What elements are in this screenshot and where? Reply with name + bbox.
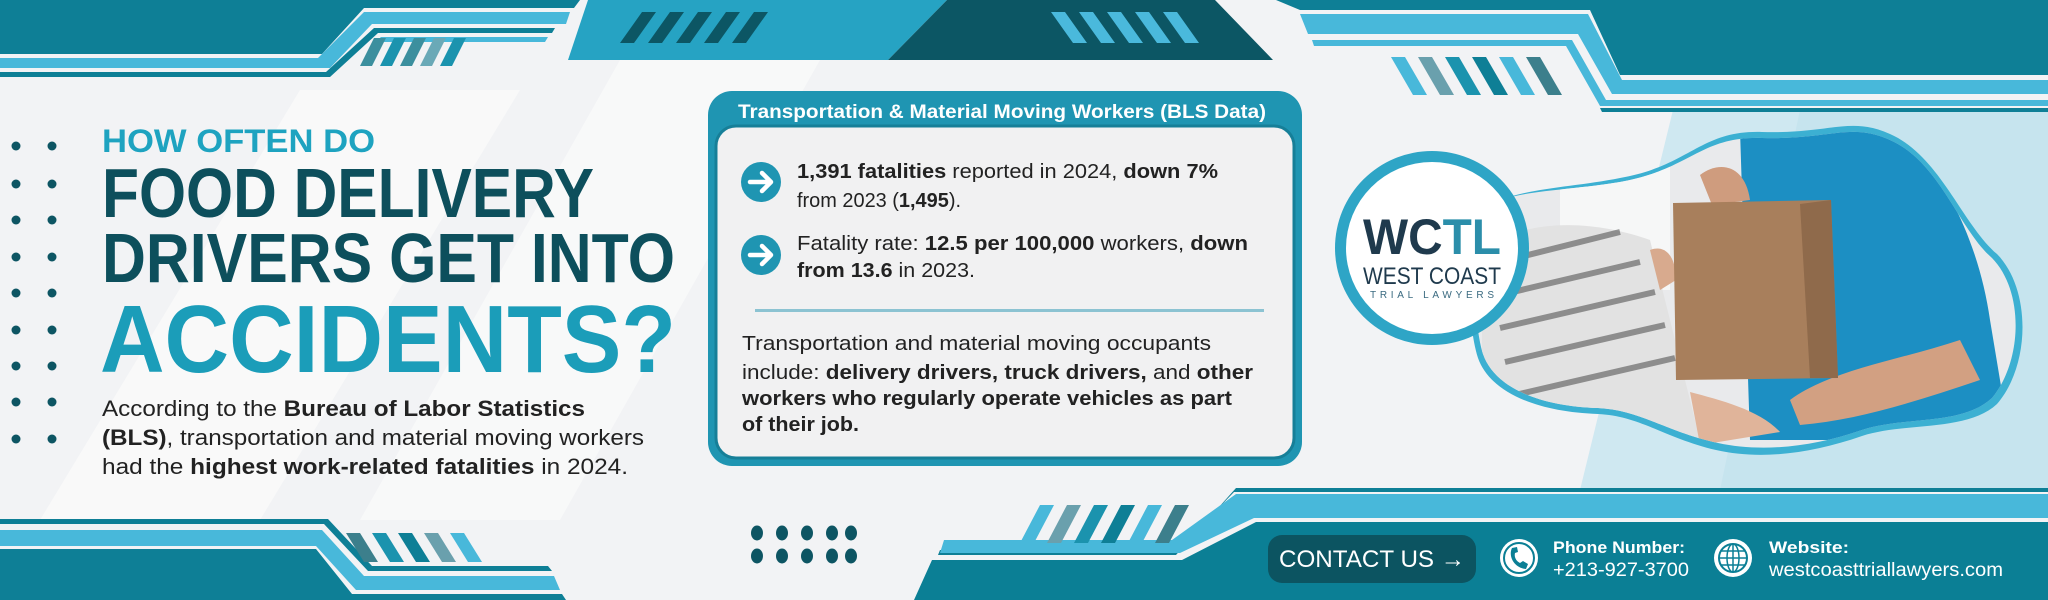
decorative dots grid [751, 526, 857, 564]
icon: arrow 1 [741, 162, 781, 202]
top-right decoration [1276, 0, 2048, 112]
logo: West Coast Trial Lawyers [1335, 151, 1529, 345]
website text: westcoasttriallawyers.com [1768, 560, 2003, 581]
intro paragraph [102, 396, 644, 479]
title block: FOOD DELIVERY [102, 154, 594, 232]
phone text: +213-927-3700 [1553, 560, 1689, 581]
website text [1768, 538, 2003, 581]
card paragraph: of their job. [742, 414, 859, 436]
icon: arrow 2 [741, 235, 781, 275]
logo: West Coast Trial Lawyers: WEST COAST [1363, 263, 1501, 290]
logo: West Coast Trial Lawyers: TRIAL LAWYERS [1370, 290, 1494, 301]
logo: West Coast Trial Lawyers: WCTL [1363, 209, 1501, 265]
card paragraph: workers who regularly operate vehicles as part [741, 388, 1232, 410]
website text: Website: [1769, 538, 1849, 557]
intro paragraph: According to the Bureau of Labor Statistics [102, 396, 585, 421]
intro paragraph: had the highest work-related fatalities in 2024. [102, 454, 628, 479]
top-center decoration [568, 0, 1273, 60]
intro paragraph: (BLS) , transportation and material moving workers [102, 425, 644, 450]
title block: DRIVERS GET INTO [102, 219, 675, 297]
card header: Transportation & Material Moving Workers (BLS Data) [738, 102, 1266, 123]
card paragraph [741, 333, 1253, 436]
icon: globe [1714, 539, 1752, 577]
title block: HOW OFTEN DO [102, 123, 375, 159]
photo: delivery handoff [1470, 120, 2030, 460]
bullet 1 text: from 2023 (1,495). [797, 190, 961, 212]
bullet 1 text: 1,391 fatalities reported in 2024, down 7% [797, 161, 1218, 183]
bottom-left decoration [0, 519, 566, 600]
card paragraph: include: delivery drivers, truck drivers, and other [742, 362, 1253, 384]
panel: BLS data card [708, 91, 1302, 466]
title block [100, 123, 676, 393]
contact us button: CONTACT US → [1279, 546, 1465, 573]
top-left decoration [0, 0, 580, 77]
bottom-right decoration [914, 488, 2048, 600]
phone text: Phone Number: [1553, 538, 1685, 557]
contact us button [1268, 535, 1476, 583]
title block: ACCIDENTS? [100, 286, 676, 393]
bullet 2 text: from 13.6 in 2023. [797, 260, 975, 282]
icon: phone [1500, 539, 1538, 577]
decorative dots: left column [12, 142, 56, 444]
phone text [1553, 538, 1689, 581]
bullet 1 text [797, 161, 1218, 212]
bullet 2 text: Fatality rate: 12.5 per 100,000 workers, down [797, 233, 1248, 255]
card paragraph: Transportation and material moving occupants [742, 333, 1211, 355]
bullet 2 text [797, 233, 1248, 282]
